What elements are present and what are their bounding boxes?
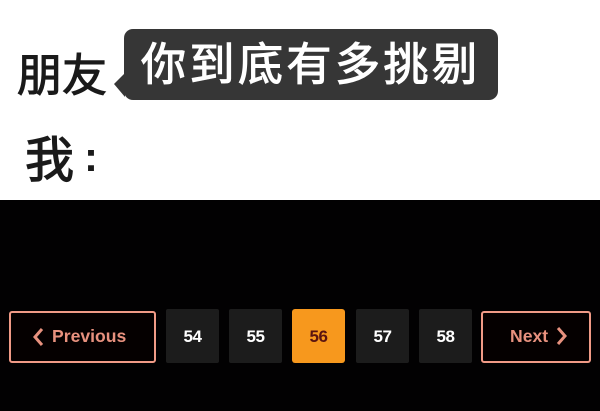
bubble tail [114,74,125,97]
previous text: Previous [52,326,126,346]
friend label: 朋友 [17,50,107,101]
black panel: pagination [0,200,600,411]
me label: 我 [25,134,74,188]
previous button [9,311,156,363]
page 57: 57 [373,327,392,346]
page 56 current: 56 [309,327,328,346]
colon: : [84,133,98,180]
page 54: 54 [183,327,202,346]
page 56 current [292,309,345,363]
page 54 [166,309,219,363]
page 57 [356,309,409,363]
speech bubble [114,29,498,100]
previous chevron [33,328,43,346]
bubble body [124,29,498,100]
next text: Next [510,326,548,346]
page 58: 58 [436,327,455,346]
next button [481,311,591,363]
bubble text: 你到底有多挑剔 [141,39,481,90]
page 55: 55 [246,327,265,346]
page 55 [229,309,282,363]
page 58 [419,309,472,363]
next chevron [557,327,567,345]
